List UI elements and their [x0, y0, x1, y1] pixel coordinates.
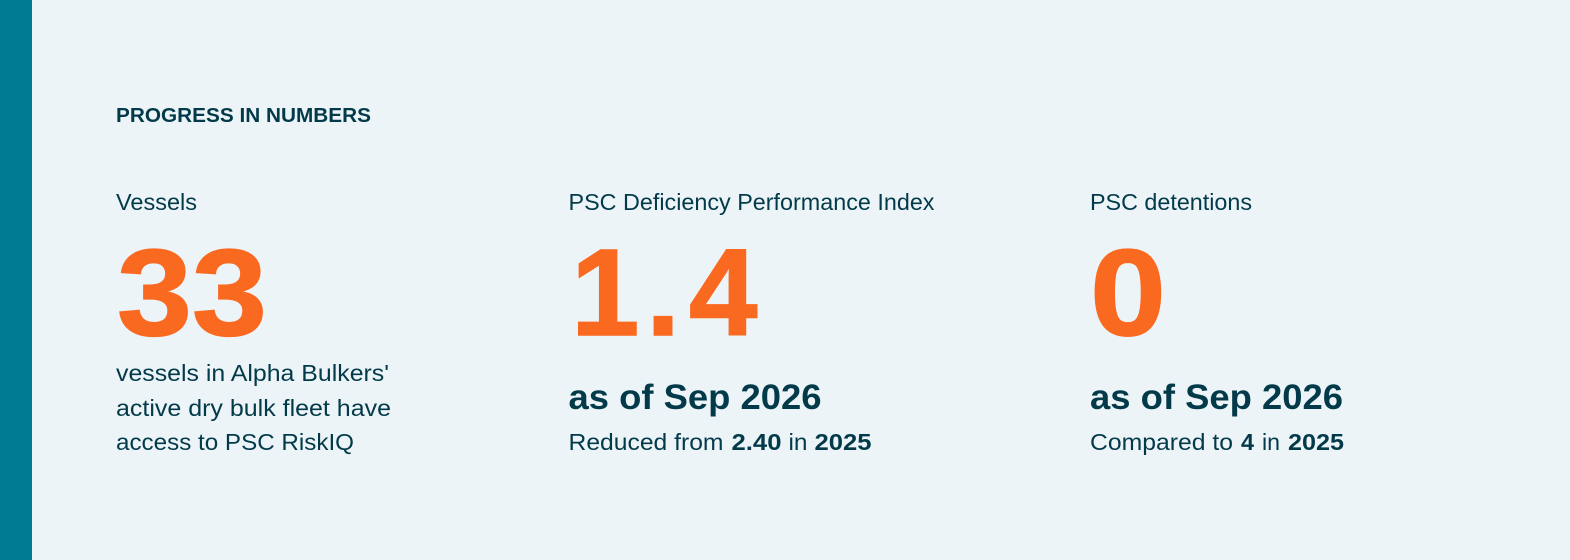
detentions comparison	[1090, 429, 1344, 455]
index number: 1.4	[571, 225, 757, 362]
panel: vessels	[116, 189, 391, 455]
vessels description: vessels in Alpha Bulkers'	[116, 360, 389, 386]
detentions comparison: in	[1262, 429, 1280, 455]
left accent bar	[0, 0, 32, 560]
index comparison: 2025	[814, 429, 872, 455]
detentions date: as of Sep 2026	[1090, 378, 1343, 417]
index comparison: 2.40	[732, 429, 782, 455]
panel: PSC deficiency performance index	[568, 189, 935, 455]
panel: PSC detentions	[1090, 189, 1344, 455]
detentions label: PSC detentions	[1090, 189, 1252, 215]
detentions comparison: 4	[1241, 429, 1254, 455]
index comparison: Reduced from	[568, 429, 724, 455]
title: PROGRESS IN NUMBERS	[116, 105, 371, 127]
vessels description	[116, 360, 391, 455]
index comparison	[568, 429, 872, 455]
vessels description: active dry bulk fleet have	[116, 395, 391, 421]
index date: as of Sep 2026	[568, 378, 822, 417]
vessels label: Vessels	[116, 189, 197, 215]
detentions comparison: 2025	[1288, 429, 1344, 455]
detentions number: 0	[1090, 225, 1166, 362]
index comparison: in	[788, 429, 808, 455]
index label: PSC Deficiency Performance Index	[568, 189, 935, 215]
detentions comparison: Compared to	[1090, 429, 1233, 455]
vessels number: 33	[117, 225, 267, 362]
vessels description: access to PSC RiskIQ	[116, 429, 354, 455]
